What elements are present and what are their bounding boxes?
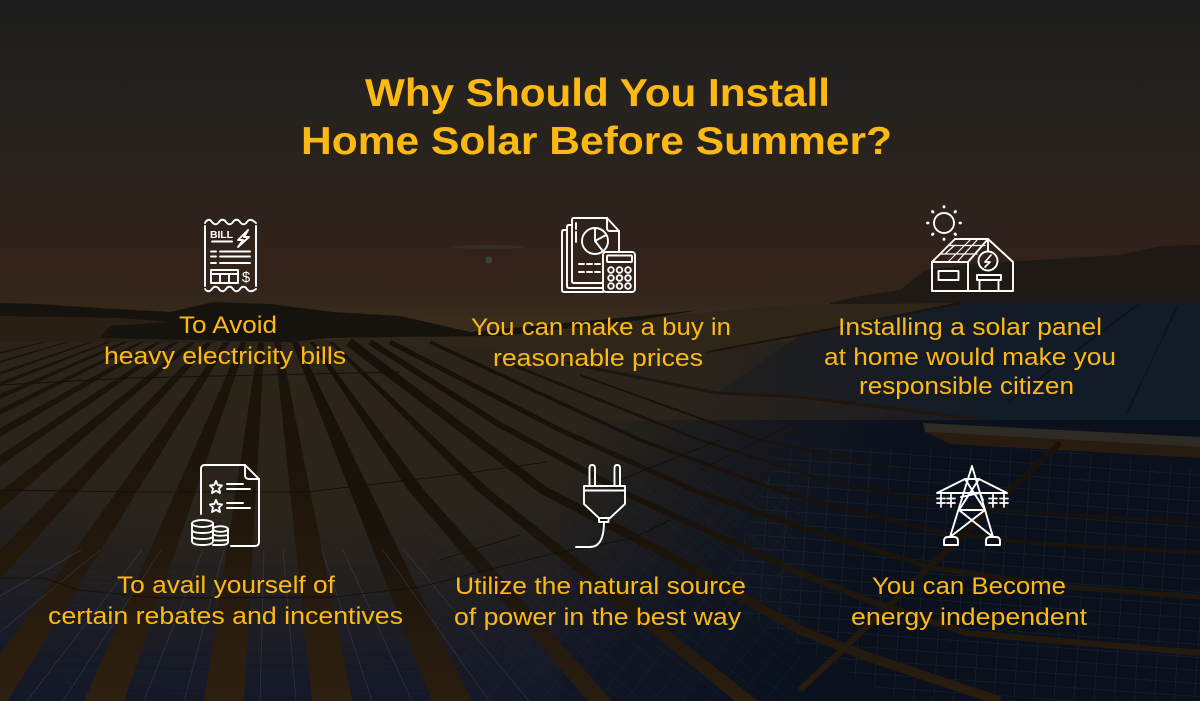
caption: reasonable prices: reasonable prices [493, 345, 703, 372]
icon: electricity bill [205, 220, 256, 291]
icon: transmission tower [937, 466, 1008, 545]
icon: electricity bill: BILL [210, 229, 234, 241]
caption: reasonable prices: You can make a buy in [471, 314, 731, 341]
caption: energy independent [851, 573, 1087, 631]
caption: energy independent: You can Become [872, 573, 1066, 600]
title: Home Solar Before Summer? [301, 120, 892, 163]
item: responsible citizen [824, 206, 1116, 400]
caption: rebates and incentives: To avail yourself of [117, 572, 335, 599]
caption: rebates and incentives [48, 572, 403, 630]
caption: responsible citizen: Installing a solar panel [838, 314, 1102, 341]
caption: reasonable prices [471, 314, 731, 372]
caption: avoid bills: To Avoid [179, 312, 277, 339]
caption: energy independent: energy independent [851, 604, 1087, 631]
title [301, 72, 892, 163]
caption: responsible citizen: at home would make you [824, 344, 1116, 371]
item: reasonable prices [471, 218, 731, 372]
item: natural source of power [454, 465, 746, 631]
caption: avoid bills [104, 312, 346, 370]
caption: responsible citizen: responsible citizen [859, 373, 1074, 400]
icon: solar house with sun [928, 206, 1013, 291]
title: Why Should You Install [365, 72, 830, 115]
icon: power plug [576, 465, 625, 547]
caption: responsible citizen [824, 314, 1116, 400]
icon: document with stars and coins [192, 465, 259, 546]
icon: electricity bill: $ [242, 269, 251, 286]
caption: natural source of power: Utilize the natural source [455, 573, 746, 600]
caption: avoid bills: heavy electricity bills [104, 343, 346, 370]
caption: natural source of power: of power in the best way [454, 604, 741, 631]
item: avoid bills [104, 220, 346, 370]
icon: report and calculator [562, 218, 635, 292]
caption: rebates and incentives: certain rebates and incentives [48, 603, 403, 630]
item: rebates and incentives [48, 465, 403, 630]
caption: natural source of power [454, 573, 746, 631]
item: energy independent [851, 466, 1087, 631]
